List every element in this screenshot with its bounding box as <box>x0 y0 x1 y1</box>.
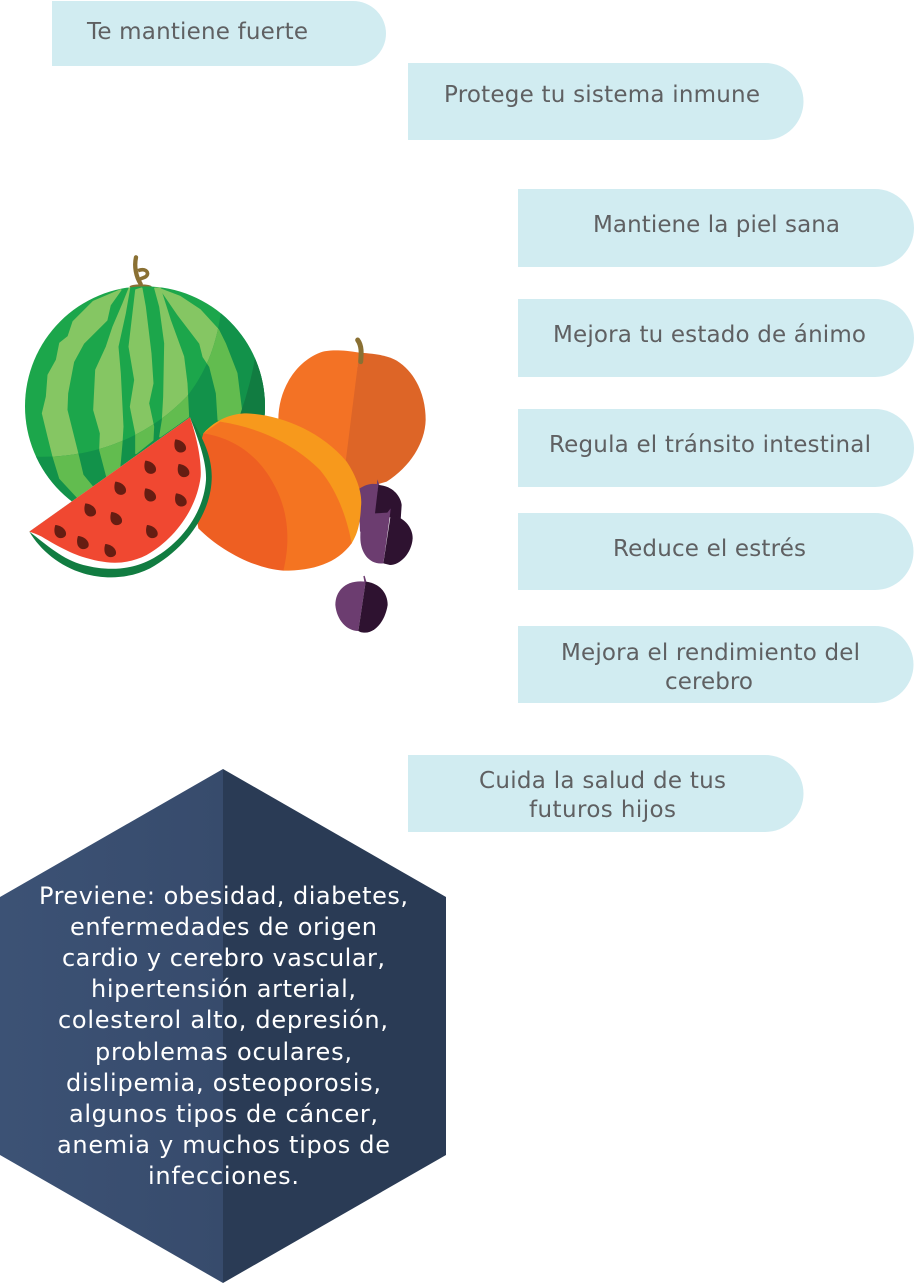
benefit pill: Te mantiene fuerte <box>52 1 386 66</box>
icon: purple plums <box>335 479 413 633</box>
benefit pill: Reduce el estrés: Reduce el estrés <box>613 536 806 562</box>
benefit pill: Mejora tu estado de ánimo <box>518 299 914 377</box>
prevention text: Previene: obesidad, diabetes, <box>39 882 408 910</box>
benefit pill: Reduce el estrés <box>518 513 914 590</box>
prevention text: dislipemia, osteoporosis, <box>66 1069 381 1097</box>
benefit pill: Mejora el rendimiento del cerebro: cerebro <box>665 669 753 695</box>
icon: whole watermelon <box>10 257 293 540</box>
benefit pill: Regula el tránsito intestinal <box>518 409 914 487</box>
benefit pill: Cuida la salud de tus futuros hijos: Cuida la salud de tus <box>479 768 726 794</box>
seeds <box>54 439 189 557</box>
benefit pill: Mantiene la piel sana <box>518 189 914 267</box>
prevention text: enfermedades de origen <box>70 913 377 941</box>
benefit pill: Mejora el rendimiento del cerebro: Mejora el rendimiento del <box>561 640 860 666</box>
prevention text <box>39 882 408 1190</box>
benefit pill: Cuida la salud de tus futuros hijos: futuros hijos <box>529 797 676 823</box>
prevention text: hipertensión arterial, <box>91 975 356 1003</box>
hexagon panel: prevention <box>0 769 446 1283</box>
prevention text: infecciones. <box>148 1162 299 1190</box>
prevention text: anemia y muchos tipos de <box>57 1131 390 1159</box>
benefit pill: Regula el tránsito intestinal: Regula el tránsito intestinal <box>549 432 871 458</box>
icon: orange fruit behind <box>278 340 426 490</box>
prevention text: cardio y cerebro vascular, <box>62 944 385 972</box>
prevention text: colesterol alto, depresión, <box>58 1006 388 1034</box>
benefit pill: Te mantiene fuerte: Te mantiene fuerte <box>86 19 308 45</box>
fruit illustration <box>10 257 426 633</box>
benefit pill: Protege tu sistema inmune: Protege tu sistema inmune <box>444 82 760 108</box>
prevention text: problemas oculares, <box>95 1038 352 1066</box>
benefit pill: Mantiene la piel sana: Mantiene la piel sana <box>593 212 840 238</box>
benefit pill: Mejora tu estado de ánimo: Mejora tu estado de ánimo <box>553 322 866 348</box>
icon: orange fruit in front <box>190 413 361 571</box>
prevention text: algunos tipos de cáncer, <box>69 1100 378 1128</box>
benefit pill: Cuida la salud de tus futuros hijos <box>408 755 804 832</box>
benefit pill: Protege tu sistema inmune <box>408 63 804 140</box>
benefit pill: Mejora el rendimiento del cerebro <box>518 626 914 703</box>
icon: watermelon slice <box>29 417 212 577</box>
